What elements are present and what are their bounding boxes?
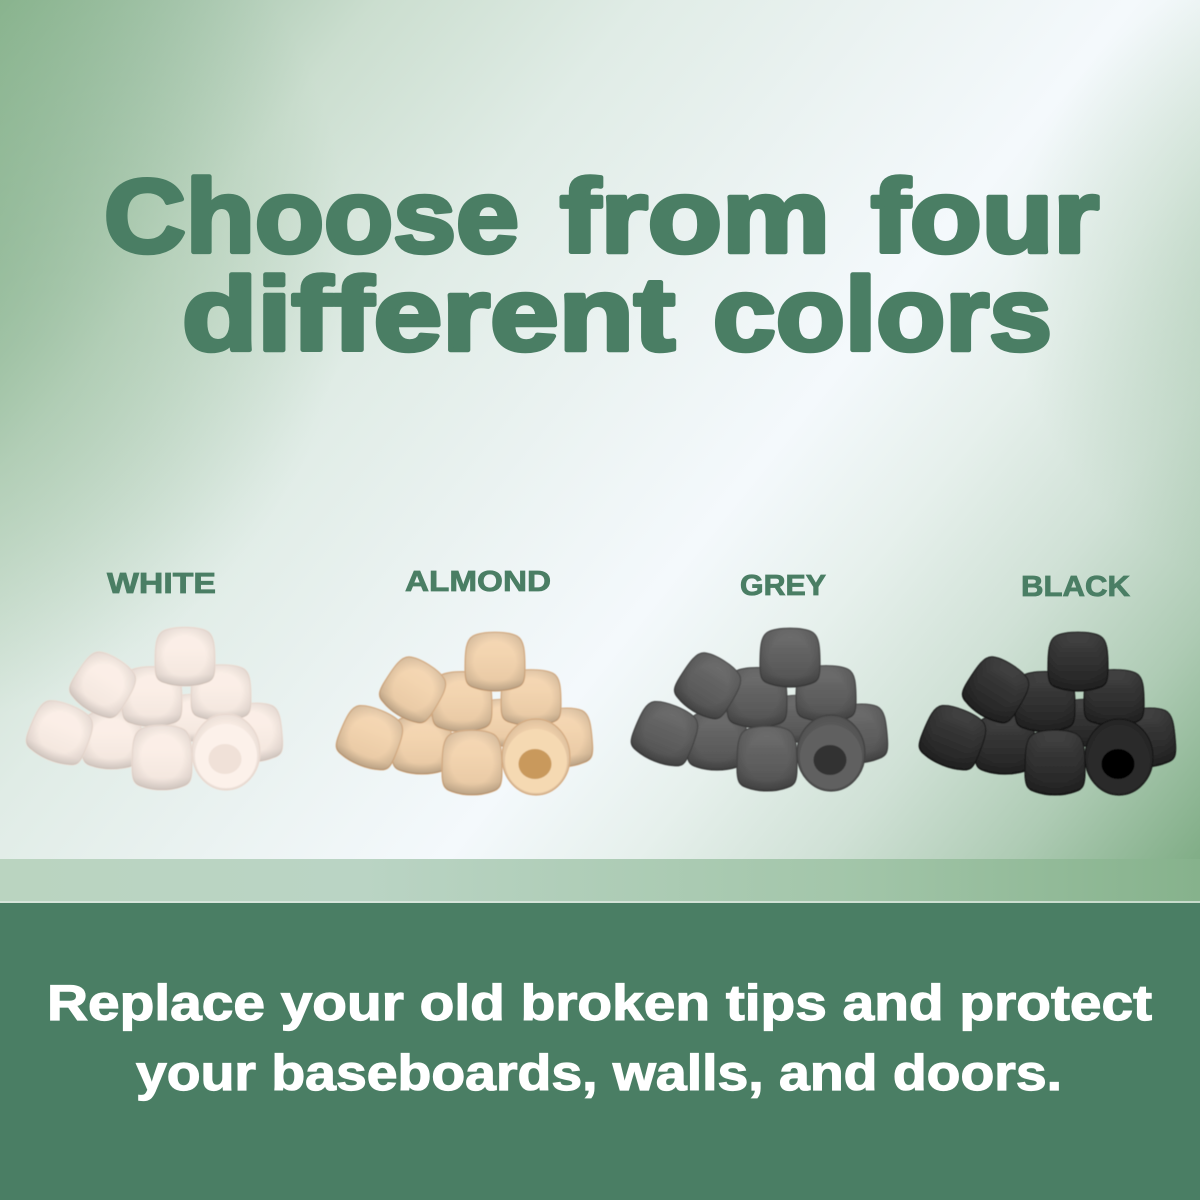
title: colors (713, 257, 1052, 373)
product pile: grey caps (626, 628, 889, 791)
footer text: Replace your old broken tips and protect (47, 975, 1152, 1031)
color option: almond (331, 566, 594, 795)
color option: white (21, 568, 284, 790)
title: different (182, 257, 675, 373)
label: grey: GREY (740, 570, 826, 602)
label: almond: ALMOND (405, 566, 551, 598)
label: white: WHITE (107, 568, 216, 600)
title: Choose (104, 159, 519, 275)
label: black: BLACK (1021, 571, 1130, 603)
color option: black (914, 571, 1177, 795)
footer text (47, 975, 1152, 1101)
product pile: almond caps (331, 632, 594, 795)
footer panel (0, 903, 1200, 1200)
title: four (871, 159, 1099, 275)
background gradient panel (0, 0, 1200, 862)
product pile: white caps (21, 627, 284, 790)
title (104, 159, 1099, 373)
shelf band (0, 859, 1200, 903)
footer text: your baseboards, walls, and doors. (136, 1045, 1062, 1101)
product pile: black caps (914, 632, 1177, 795)
title: from (560, 159, 830, 275)
color option: grey (626, 570, 889, 791)
